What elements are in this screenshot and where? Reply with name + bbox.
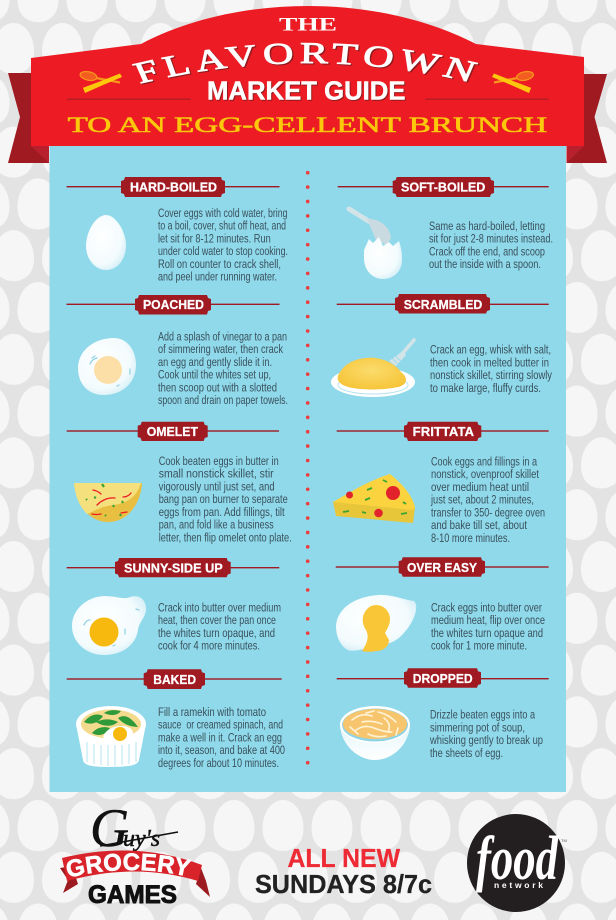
header: hard-boiled xyxy=(66,177,280,197)
wordmark: GAMES: GAMES xyxy=(88,881,177,909)
header: baked: BAKED xyxy=(153,673,196,687)
icon: frittata slice xyxy=(333,474,415,523)
text: baked: sauce or creamed spinach, and xyxy=(158,718,283,732)
text: frittata xyxy=(430,454,545,545)
icon: ramekin xyxy=(76,706,146,767)
subtitle: TO AN EGG-CELLENT BRUNCH xyxy=(68,112,547,137)
text: frittata: transfer to 350- degree oven xyxy=(431,505,545,519)
section: omelet xyxy=(67,422,292,544)
SUNDAYS 8/7c: SUNDAYS 8/7c xyxy=(255,869,432,899)
wordmark: network: network xyxy=(494,880,543,890)
text: poached: spoon and drain on paper towels. xyxy=(158,393,288,407)
header: over easy xyxy=(336,557,549,577)
wordmark: GROCERY: GROCERY xyxy=(66,853,192,877)
header: baked xyxy=(67,669,282,689)
icon: folded omelet xyxy=(74,483,142,522)
text: hard-boiled xyxy=(158,206,288,284)
text: dropped: whisking gently to break up xyxy=(429,733,543,747)
text: dropped: Drizzle beaten eggs into a xyxy=(430,708,535,722)
text: scrambled xyxy=(430,343,553,395)
text: over easy: medium heat, flip over once xyxy=(431,613,545,627)
text: soft-boiled: sit for just 2-8 minutes instead. xyxy=(429,232,553,246)
text: soft-boiled: Same as hard-boiled, letting xyxy=(429,219,545,233)
title: MARKET GUIDE: MARKET GUIDE xyxy=(207,76,406,106)
icon: crossed whisk and spatula right xyxy=(492,70,534,93)
text: omelet: small nonstick skillet, stir xyxy=(159,467,274,481)
text: scrambled: Crack an egg, whisk with salt, xyxy=(430,343,551,357)
left rule xyxy=(67,99,190,100)
text: soft-boiled: out the inside with a spoon. xyxy=(429,257,541,271)
header: scrambled: SCRAMBLED xyxy=(404,298,482,312)
title: FLAVORTOWN: FLAVORTOWN xyxy=(132,42,480,85)
section: poached xyxy=(66,295,288,407)
header: sunny-side up xyxy=(67,558,279,577)
header: frittata: FRITTATA xyxy=(413,425,474,439)
header: over easy: OVER EASY xyxy=(407,561,478,575)
text: hard-boiled: Cover eggs with cold water, bring xyxy=(158,206,288,220)
text: baked: degrees for about 10 minutes. xyxy=(158,756,279,770)
text: omelet: eggs from pan. Add fillings, tilt xyxy=(159,505,285,519)
text: frittata: over medium heat until xyxy=(431,480,529,494)
icon: soup bowl xyxy=(340,706,410,760)
section: dropped xyxy=(337,668,549,760)
text: hard-boiled: under cold water to stop cooking. xyxy=(158,244,288,258)
logo: Food Network xyxy=(467,814,567,912)
header: soft-boiled xyxy=(338,177,549,197)
text: baked xyxy=(158,705,285,770)
ribbon tail: left xyxy=(8,73,49,163)
text: poached: an egg and gently slide it in. xyxy=(158,355,272,369)
icon: scrambled eggs on plate with fork xyxy=(331,340,415,397)
text: hard-boiled: let sit for 8-12 minutes. Run xyxy=(158,232,271,246)
section: baked xyxy=(67,669,285,770)
text: hard-boiled: and peel under running water. xyxy=(158,270,277,284)
ribbon tail: right xyxy=(196,868,210,897)
wordmark: food: food xyxy=(476,825,559,893)
blue content panel xyxy=(50,146,566,792)
text: sunny-side up: Crack into butter over medium xyxy=(158,600,281,614)
header: frittata xyxy=(337,422,549,441)
text: hard-boiled: to a boil, cover, shut off heat, and xyxy=(158,219,286,233)
text: sunny-side up xyxy=(158,600,281,652)
header: omelet: OMELET xyxy=(147,425,198,439)
text: sunny-side up: the whites turn opaque, and xyxy=(158,626,275,640)
text: omelet: pan, and fold like a business xyxy=(159,518,274,532)
text: frittata: Cook eggs and fillings in a xyxy=(431,454,537,468)
text: frittata: 8-10 more minutes. xyxy=(431,531,510,545)
header: poached: POACHED xyxy=(143,298,204,312)
text: hard-boiled: Roll on counter to crack shell, xyxy=(158,257,281,271)
text: baked: Fill a ramekin with tomato xyxy=(158,705,266,719)
text: poached xyxy=(158,330,288,407)
text: soft-boiled: Crack off the end, and scoop xyxy=(429,244,545,258)
text: frittata: and bake till set, about xyxy=(431,518,527,532)
text: sunny-side up: heat, then cover the pan once xyxy=(158,613,276,627)
text: scrambled: nonstick skillet, stirring slowly xyxy=(430,368,553,382)
section: scrambled xyxy=(331,294,553,397)
ribbon red xyxy=(62,850,202,881)
section: hard-boiled xyxy=(66,177,288,284)
header: hard-boiled: HARD-BOILED xyxy=(130,181,217,195)
signature: Guy's: Guy's xyxy=(90,798,160,858)
text: scrambled: then cook in melted butter in xyxy=(430,355,549,369)
header: dropped: DROPPED xyxy=(413,672,473,686)
text: poached: Cook until the whites set up, xyxy=(158,368,271,382)
text: soft-boiled xyxy=(429,219,553,271)
text: over easy: Crack eggs into butter over xyxy=(431,600,542,614)
icon: soft-boiled egg with spoon xyxy=(349,209,402,279)
text: frittata: just set, about 2 minutes, xyxy=(430,492,534,506)
text: poached: of simmering water, then crack xyxy=(158,342,284,356)
header: omelet xyxy=(67,422,279,441)
ALL NEW: ALL NEW xyxy=(288,843,400,873)
text: omelet: bang pan on burner to separate xyxy=(159,492,288,506)
text: omelet: letter, then flip omelet onto plate. xyxy=(159,530,292,544)
ribbon tail: right xyxy=(566,74,607,163)
icon: sunny-side up egg xyxy=(72,596,146,655)
right rule xyxy=(426,99,548,100)
text: scrambled: to make large, fluffy curds. xyxy=(430,381,541,395)
text: omelet: vigorously until just set, and xyxy=(159,480,275,494)
icon: crossed whisk and spatula left xyxy=(79,70,122,93)
trademark: TM xyxy=(561,838,567,843)
text: frittata: nonstick, ovenproof skillet xyxy=(431,467,539,481)
text: omelet: Cook beaten eggs in butter in xyxy=(159,454,279,468)
text: sunny-side up: cook for 4 more minutes. xyxy=(158,638,260,652)
text: over easy xyxy=(431,600,545,652)
text: baked: make a well in it. Crack an egg xyxy=(158,730,282,744)
text: over easy: the whites turn opaque and xyxy=(431,626,543,640)
header: sunny-side up: SUNNY-SIDE UP xyxy=(124,562,223,576)
text: dropped xyxy=(429,708,543,760)
icon: whole egg xyxy=(86,215,126,270)
header: dropped xyxy=(337,668,549,688)
title: THE: THE xyxy=(279,14,337,36)
text: omelet xyxy=(159,454,292,544)
header banner xyxy=(8,6,607,163)
ribbon tail: left xyxy=(60,866,78,893)
text: poached: then scoop out with a slotted xyxy=(158,380,277,394)
text: dropped: simmering pot of soup, xyxy=(430,720,525,734)
header: scrambled xyxy=(337,294,549,314)
icon: poached egg xyxy=(78,338,136,395)
banner red shape xyxy=(31,6,584,146)
text: over easy: cook for 1 more minute. xyxy=(431,638,527,652)
section: frittata xyxy=(333,422,549,545)
header: soft-boiled: SOFT-BOILED xyxy=(401,181,485,195)
section: soft-boiled xyxy=(338,177,553,279)
text: dropped: the sheets of egg. xyxy=(430,746,503,760)
section: sunny-side up xyxy=(67,558,281,655)
dotted center divider xyxy=(306,173,310,763)
text: baked: into it, season, and bake at 400 xyxy=(158,743,285,757)
text: poached: Add a splash of vinegar to a pan xyxy=(158,330,287,344)
logo: Guy's Grocery Games xyxy=(60,798,210,909)
section: over easy xyxy=(336,557,549,652)
icon: over easy egg xyxy=(336,595,416,652)
header: poached xyxy=(66,295,280,314)
airtime text xyxy=(255,843,432,899)
